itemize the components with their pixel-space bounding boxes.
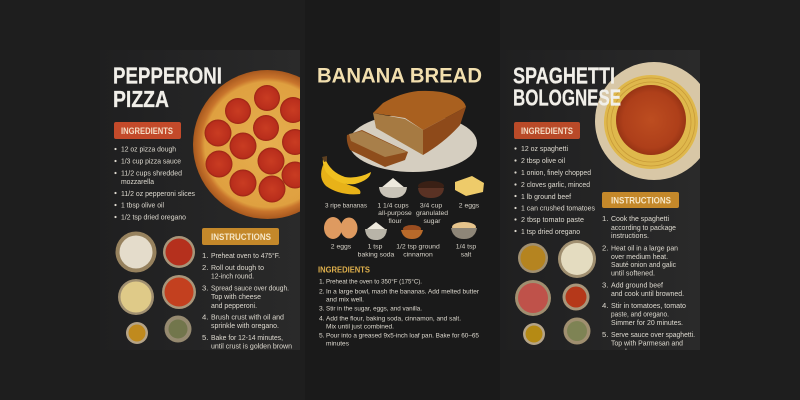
ingredients list: mozzarella — [121, 177, 155, 186]
ingredient labels row one — [325, 202, 480, 225]
instructions steps — [202, 251, 292, 350]
ingredients badge — [114, 122, 181, 139]
instructions steps: over medium heat. — [611, 252, 668, 261]
ingredient labels row one: 2 eggs — [459, 202, 480, 210]
instructions steps: 1. — [602, 214, 608, 223]
instructions steps: Simmer for 20 minutes. — [611, 318, 683, 327]
instructions badge: INSTRUCTIONS — [611, 196, 671, 206]
title: spaghetti bolognese: BOLOGNESE — [513, 84, 621, 110]
ingredient bowls — [515, 240, 596, 345]
ingredients list — [514, 144, 595, 236]
instructions steps — [602, 214, 695, 356]
title: pepperoni pizza: PIZZA — [113, 86, 169, 112]
recipe infographic — [114, 50, 700, 350]
instructions steps: sprinkle with oregano. — [211, 321, 279, 330]
ingredient labels row two: 1/2 tsp ground — [396, 244, 440, 250]
instructions steps: Spread sauce over dough. — [211, 284, 289, 292]
method steps: Stir in the sugar, eggs, and vanilla. — [326, 306, 422, 312]
method steps: 1. — [319, 278, 325, 286]
instructions steps: Add ground beef — [611, 280, 664, 290]
icon: cinnamon bowl — [401, 225, 423, 239]
method steps: Mix until just combined. — [326, 324, 394, 330]
ingredients list: 1 can crushed tomatoes — [521, 204, 595, 212]
ingredient labels row two: salt — [461, 252, 471, 258]
ingredient labels row one: 3/4 cup — [420, 202, 442, 210]
instructions steps: Cook the spaghetti — [611, 214, 669, 223]
method steps: 4. — [319, 316, 325, 322]
instructions steps: 4. — [202, 312, 208, 322]
icon: flour bowl — [379, 178, 407, 198]
method steps: In a large bowl, mash the bananas. Add melted butter — [326, 288, 480, 296]
icon: baking soda bowl — [365, 222, 387, 240]
ingredients badge: INGREDIENTS — [121, 126, 173, 136]
title: spaghetti bolognese — [513, 62, 621, 110]
panel: spaghetti bolognese — [513, 50, 700, 350]
ingredients list: 12 oz spaghetti — [521, 144, 568, 153]
icon: sugar bowl — [418, 181, 444, 198]
instructions steps: instructions. — [611, 231, 649, 240]
instructions badge: INSTRUCTIONS — [211, 232, 271, 242]
method steps: 5. — [319, 332, 325, 340]
ingredient labels row two: 1 tsp — [368, 244, 383, 250]
instructions steps: 4. — [602, 301, 608, 310]
instructions steps: 2. — [602, 244, 608, 252]
ingredient labels row two: 1/4 tsp — [456, 244, 476, 250]
instructions badge — [202, 228, 279, 245]
instructions steps: 3. — [202, 284, 208, 292]
icon: bananas — [321, 156, 371, 194]
method steps: 3. — [319, 306, 325, 312]
pizza illustration — [193, 70, 300, 219]
ingredients list: 2 cloves garlic, minced — [521, 180, 590, 189]
title: banana bread: BANANA BREAD — [317, 64, 482, 88]
ingredients list: 2 tbsp olive oil — [521, 156, 565, 165]
ingredient labels row one: 3 ripe bananas — [325, 202, 368, 210]
icon: eggs — [324, 217, 358, 239]
instructions steps: 12-inch round. — [211, 272, 254, 280]
instructions steps: 1. — [202, 251, 208, 260]
heading: ingredients: INGREDIENTS — [318, 266, 371, 274]
instructions steps: Roll out dough to — [211, 263, 264, 272]
method steps: Preheat the oven to 350°F (175°C). — [326, 278, 422, 286]
instructions steps: until softened. — [611, 268, 655, 278]
ingredients badge — [514, 122, 580, 139]
ingredient labels row two: baking soda — [358, 252, 395, 258]
ingredients badge: INGREDIENTS — [521, 126, 573, 136]
ingredients list: 1 tsp dried oregano — [521, 227, 580, 236]
instructions steps: Preheat oven to 475°F. — [211, 251, 280, 260]
instructions steps: Brush crust with oil and — [211, 312, 284, 322]
panel: banana bread — [317, 64, 484, 348]
instructions steps: 2. — [202, 263, 208, 272]
instructions steps: and pepperoni. — [211, 301, 257, 310]
illustration: spaghetti plate — [595, 62, 700, 180]
ingredient labels row two: 2 eggs — [331, 244, 352, 250]
ingredients list: 1/2 tsp dried oregano — [121, 212, 186, 222]
method steps — [319, 278, 480, 348]
instructions steps: Heat oil in a large pan — [611, 244, 678, 252]
method steps: Add the flour, baking soda, cinnamon, and salt. — [326, 316, 461, 322]
instructions steps: 3. — [602, 280, 608, 290]
instructions steps: Sauté onion and galic — [611, 260, 676, 269]
instructions steps: Bake for 12-14 minutes, — [211, 333, 283, 342]
ingredient labels row one: sugar — [423, 218, 441, 225]
ingredient labels row one: 1 1/4 cups — [377, 202, 409, 210]
instructions steps: Top with cheese — [211, 292, 261, 301]
title: pepperoni pizza: PEPPERONI — [113, 62, 222, 88]
title: spaghetti bolognese: SPAGHETTI — [513, 62, 615, 88]
icon: salt bowl — [451, 222, 477, 239]
ingredient labels row two: cinnamon — [403, 252, 433, 258]
ingredients list: 1 onion, finely chopped — [521, 168, 591, 177]
title: pepperoni pizza — [113, 62, 222, 112]
ingredient labels row one: granulated — [416, 210, 448, 217]
panel: pepperoni pizza — [114, 50, 300, 350]
instructions steps: Top with Parmesan and — [611, 338, 683, 348]
ingredient labels row two — [331, 244, 476, 258]
ingredients list: 2 tbsp tomato paste — [521, 215, 584, 224]
ingredient labels row one: flour — [388, 218, 402, 225]
ingredients list: 11/2 cups shredded — [121, 168, 182, 177]
icon: butter — [455, 176, 484, 196]
instructions steps: paste, and oregano. — [611, 310, 669, 318]
instructions badge — [602, 192, 679, 208]
instructions steps: 5. — [202, 333, 208, 342]
method steps: 2. — [319, 288, 325, 296]
illustration: loaf on plate — [347, 91, 477, 172]
ingredients list: 11/2 oz pepperoni slices — [121, 189, 195, 198]
instructions steps: parsley. — [611, 347, 636, 356]
method steps: minutes — [326, 340, 350, 348]
ingredients list: 12 oz pizza dough — [121, 144, 176, 154]
ingredients list: 1 tbsp olive oil — [121, 200, 164, 210]
instructions steps: Serve sauce over spaghetti. — [611, 330, 695, 339]
ingredients list: 1 lb ground beef — [521, 192, 572, 201]
ingredients list — [114, 144, 195, 222]
instructions steps: until crust is golden brown — [211, 342, 292, 350]
method steps: and mix well. — [326, 296, 364, 304]
instructions steps: and cook until browned. — [611, 289, 684, 298]
instructions steps: according to package — [611, 223, 676, 232]
instructions steps: 5. — [602, 330, 608, 339]
instructions steps: Stir in tomatoes, tomato — [611, 301, 686, 310]
method steps: Pour into a greased 9x5-inch loaf pan. Bake for 60–65 — [326, 332, 479, 340]
ingredient labels row one: all-purpose — [378, 210, 412, 217]
ingredient bowls — [116, 232, 196, 344]
ingredients list: 1/3 cup pizza sauce — [121, 156, 181, 166]
